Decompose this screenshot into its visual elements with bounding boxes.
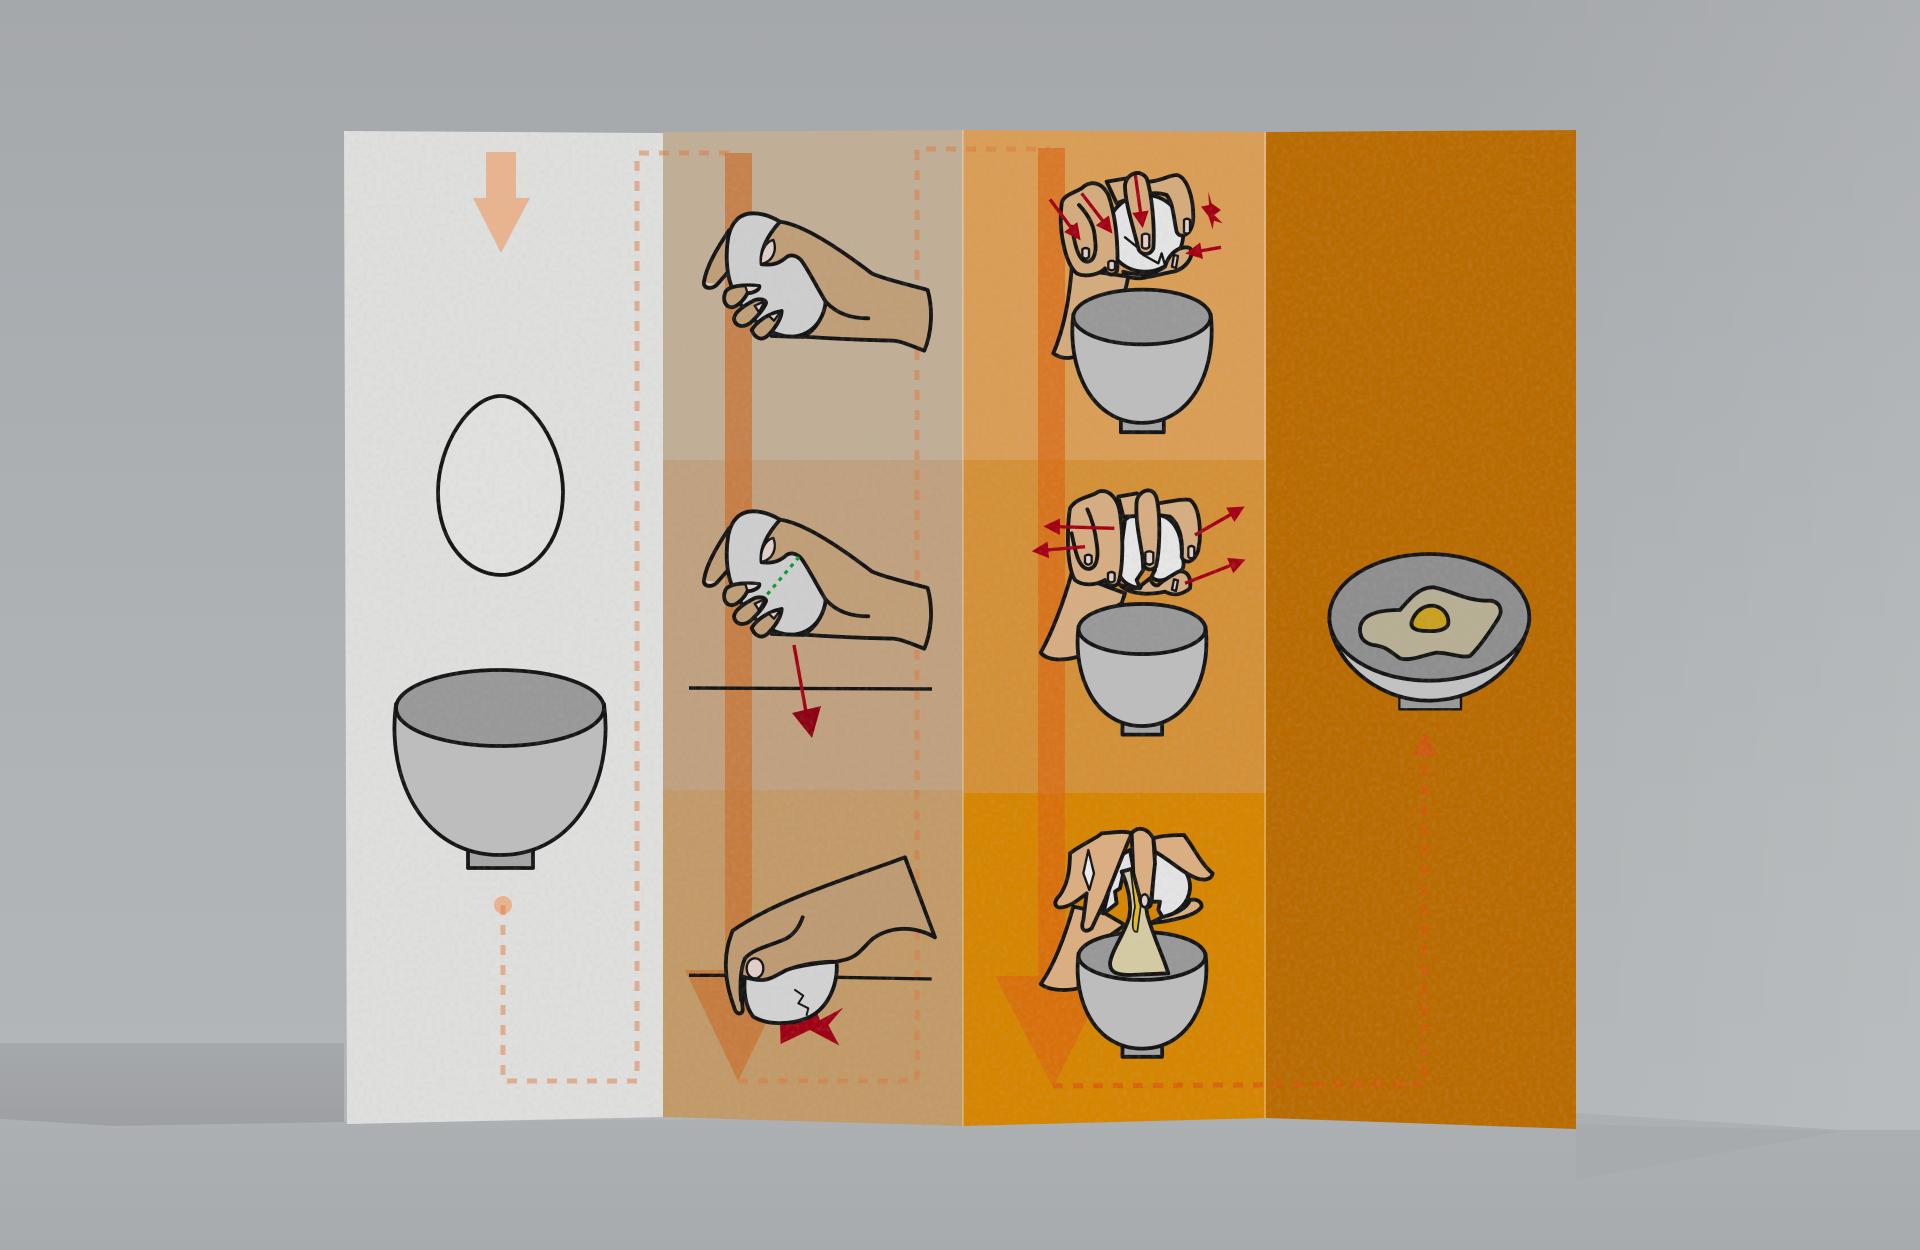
left shell xyxy=(1103,850,1133,913)
middle finger xyxy=(1132,829,1155,907)
step: egg dropping into bowl xyxy=(1041,829,1213,1057)
floor xyxy=(0,1113,1920,1250)
panel 1: egg and bowl xyxy=(344,131,663,1124)
panel 3: opening the shell xyxy=(963,130,1266,1126)
bowl foot xyxy=(1399,695,1461,709)
hand pressing xyxy=(726,857,935,1014)
dashed path: panel 2 to panel 3 xyxy=(738,149,1050,1081)
red arrow: downward tap xyxy=(792,645,821,738)
floor shadow: left xyxy=(0,1043,344,1126)
finished fried egg in bowl xyxy=(1329,554,1529,709)
egg xyxy=(1107,195,1183,272)
table edge line xyxy=(689,975,932,979)
thumb xyxy=(1123,247,1191,278)
wrist xyxy=(1053,268,1128,358)
nails xyxy=(1085,546,1194,591)
icon: bowl xyxy=(394,670,606,868)
step: fingers opening shell over bowl xyxy=(1041,490,1232,660)
shell crack xyxy=(1125,237,1165,265)
yolk xyxy=(1411,606,1448,631)
table edge line xyxy=(689,688,932,689)
red arrows: pull apart xyxy=(1058,527,1114,528)
back of hand xyxy=(1107,175,1193,236)
red crack burst xyxy=(1201,192,1223,229)
right fingers xyxy=(1153,835,1213,880)
thumb xyxy=(1150,900,1202,923)
egg white pouring xyxy=(1110,867,1168,975)
left fingers xyxy=(1055,832,1132,931)
floor shadow: right xyxy=(1576,1124,1843,1180)
thumb xyxy=(1120,571,1190,594)
bowl body xyxy=(1329,617,1528,701)
wrist and palm xyxy=(1041,907,1125,990)
yolk strand xyxy=(1131,869,1141,932)
wrist xyxy=(1041,573,1125,660)
red arrows: squeeze xyxy=(1050,199,1072,228)
middle finger xyxy=(1125,173,1154,254)
left fingers xyxy=(1061,183,1117,275)
bowl: step 5 xyxy=(1078,604,1206,735)
left fingers xyxy=(1068,491,1122,586)
arrow: start xyxy=(473,152,530,253)
egg white xyxy=(1360,587,1501,659)
bowl: step 4 xyxy=(1072,290,1212,432)
impact burst xyxy=(780,1008,843,1046)
right shell xyxy=(1152,853,1190,918)
panel 4: finished egg xyxy=(1266,130,1576,1129)
green crack guide xyxy=(765,557,799,597)
panel 2: tapping the egg xyxy=(663,130,963,1126)
bowl interior xyxy=(1329,554,1529,681)
arrow: panel 2 downward xyxy=(685,153,792,1081)
back of hand xyxy=(1118,493,1200,562)
step: hand holding egg xyxy=(704,213,931,351)
fold highlights xyxy=(963,130,1265,1126)
shell halves xyxy=(1118,514,1143,588)
arrow: panel 3 downward xyxy=(995,148,1109,1087)
paper texture xyxy=(344,130,1576,1129)
step: fingers gripping egg over bowl xyxy=(1050,173,1223,358)
nails xyxy=(1082,219,1190,270)
bowl: step 6 xyxy=(1078,932,1206,1057)
middle finger xyxy=(1136,490,1159,569)
icon: egg xyxy=(438,396,563,575)
cracking egg xyxy=(744,962,837,1023)
step: egg striking the edge xyxy=(689,857,935,1046)
dashed path: panel 1 to panel 2 xyxy=(494,153,735,1081)
dashed path: panel 3 to panel 4 xyxy=(1053,731,1437,1086)
step: hand aiming at the edge xyxy=(689,511,932,738)
